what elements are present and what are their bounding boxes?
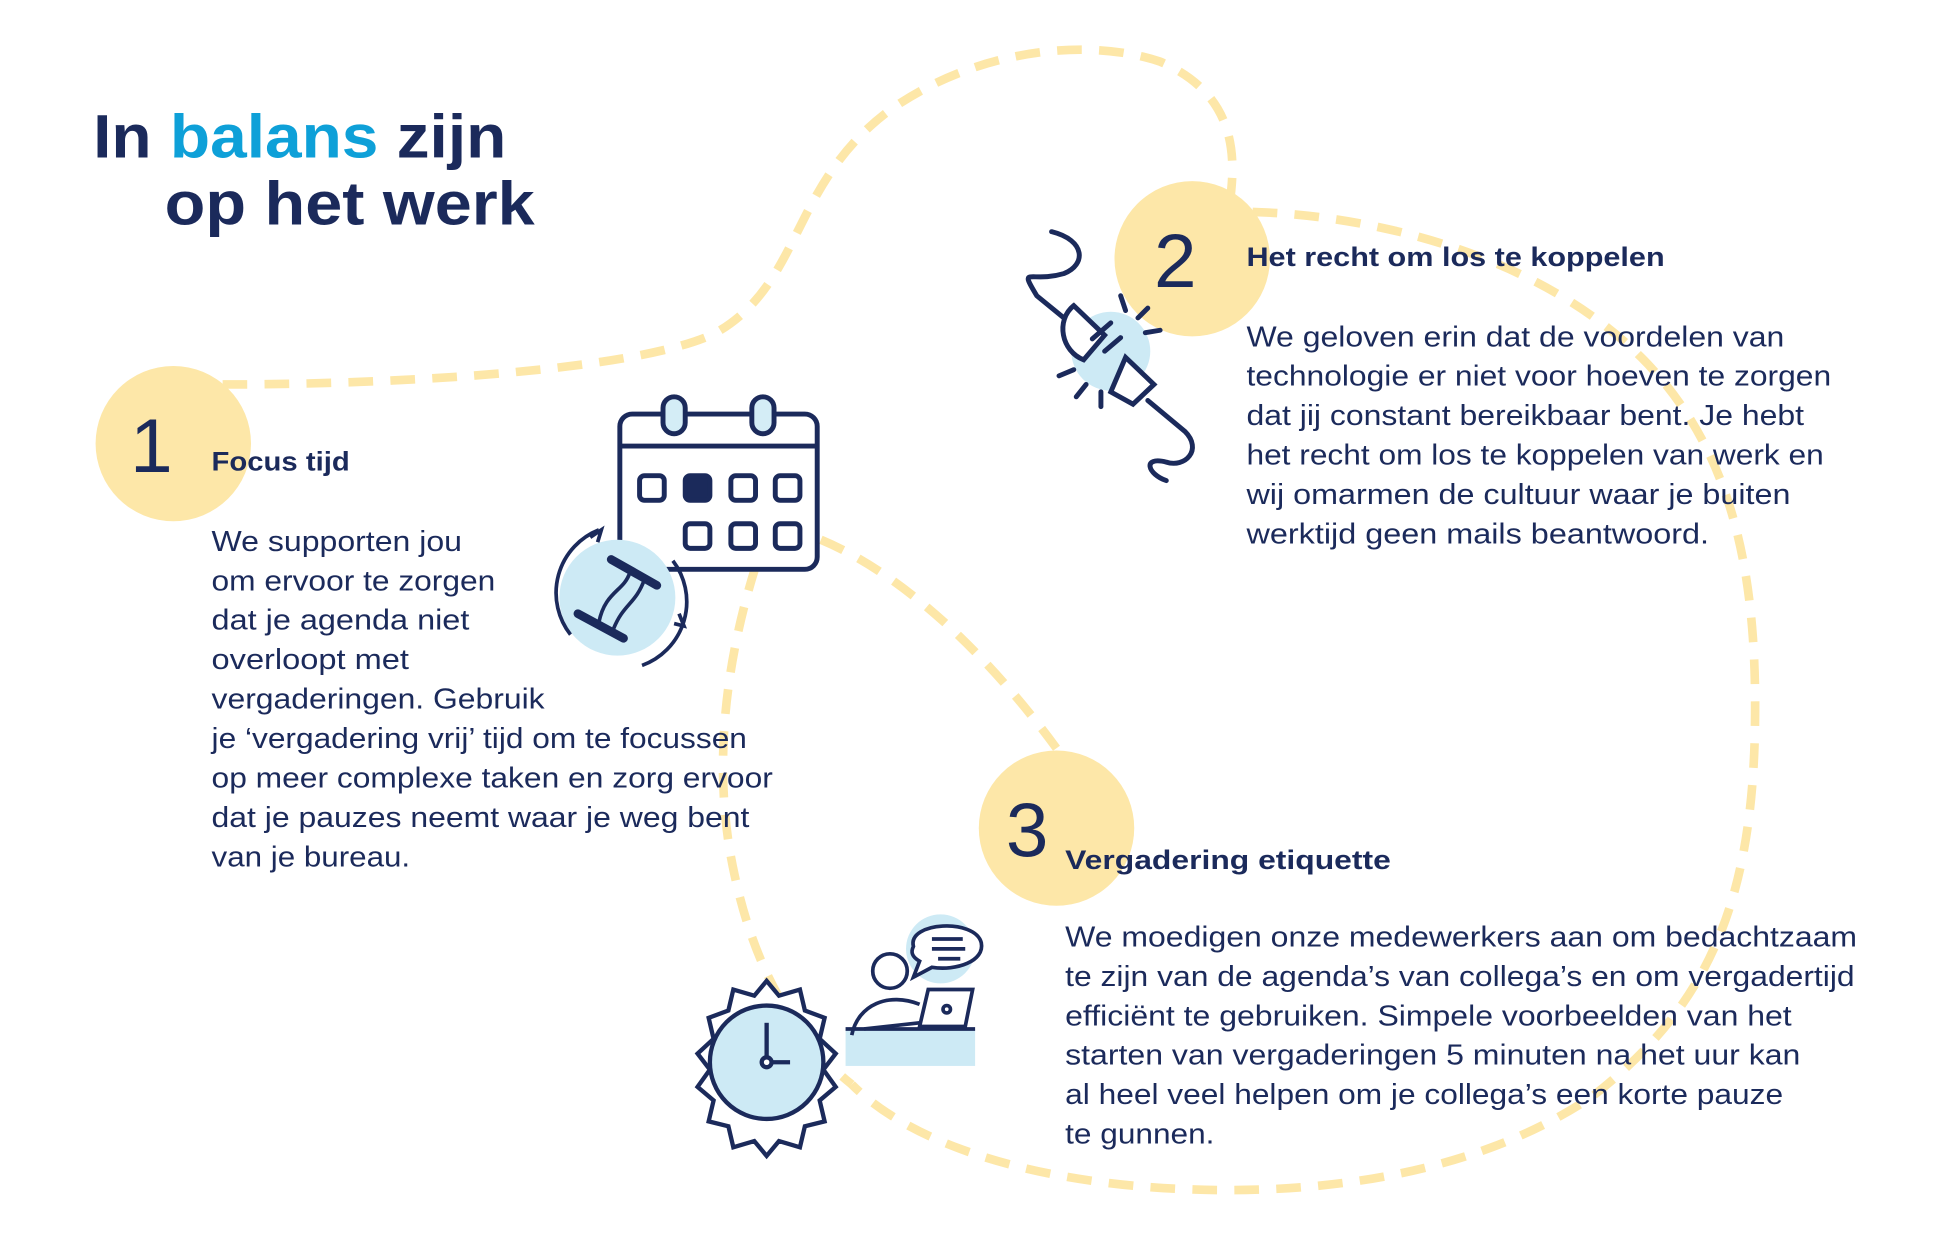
body 2 xyxy=(1245,321,1831,550)
body 3: al heel veel helpen om je collega’s een korte pauze xyxy=(1065,1079,1783,1111)
heading 1: Focus tijd xyxy=(212,446,350,477)
body 3: We moedigen onze medewerkers aan om bedachtzaam xyxy=(1065,921,1857,953)
section 3 xyxy=(979,750,1857,1151)
section 1 xyxy=(96,366,773,873)
body 2: werktijd geen mails beantwoord. xyxy=(1245,518,1709,550)
body 3 xyxy=(1065,921,1857,1151)
body 1: op meer complexe taken en zorg ervoor xyxy=(212,762,773,794)
icon: calendar xyxy=(620,397,817,569)
body 3: te zijn van de agenda’s van collega’s en om vergadertijd xyxy=(1065,961,1855,993)
body 1: overloopt met xyxy=(212,644,409,676)
body 3: efficiënt te gebruiken. Simpele voorbeelden van het xyxy=(1065,1000,1792,1032)
icon: person at laptop with speech bubble xyxy=(846,914,982,1066)
body 3: starten van vergaderingen 5 minuten na het uur kan xyxy=(1065,1040,1800,1072)
body 1: je ‘vergadering vrij’ tijd om te focussen xyxy=(210,723,747,755)
body 1: dat je pauzes neemt waar je weg bent xyxy=(212,802,749,834)
icon: hourglass xyxy=(556,530,687,665)
number circle 1: 1 xyxy=(130,404,173,489)
section 2 xyxy=(1114,181,1831,550)
body 1: dat je agenda niet xyxy=(212,605,469,637)
body 2: technologie er niet voor hoeven te zorgen xyxy=(1246,361,1831,393)
icon: unplugged plug xyxy=(1028,232,1192,481)
body 1: om ervoor te zorgen xyxy=(212,565,495,597)
number circle 2 xyxy=(1114,181,1270,336)
heading 3: Vergadering etiquette xyxy=(1065,844,1391,875)
number circle 3: 3 xyxy=(1006,788,1048,873)
body 2: We geloven erin dat de voordelen van xyxy=(1246,321,1784,353)
title xyxy=(93,103,536,238)
body 2: wij omarmen de cultuur waar je buiten xyxy=(1245,479,1790,511)
heading 2: Het recht om los te koppelen xyxy=(1246,241,1665,272)
body 1: van je bureau. xyxy=(212,841,410,873)
title: op het werk xyxy=(165,169,536,238)
body 1: We supporten jou xyxy=(212,526,462,558)
number circle 2: 2 xyxy=(1154,219,1197,304)
title: In balans zijn xyxy=(93,103,506,172)
body 3: te gunnen. xyxy=(1065,1119,1214,1151)
body 2: dat jij constant bereikbaar bent. Je hebt xyxy=(1246,400,1804,432)
icon: clock gear xyxy=(698,981,836,1156)
body 1 xyxy=(210,526,773,873)
number circle 1 xyxy=(96,366,251,521)
dashed path xyxy=(223,50,1755,1190)
body 1: vergaderingen. Gebruik xyxy=(212,684,546,716)
body 2: het recht om los te koppelen van werk en xyxy=(1246,440,1824,472)
number circle 3 xyxy=(979,750,1134,906)
